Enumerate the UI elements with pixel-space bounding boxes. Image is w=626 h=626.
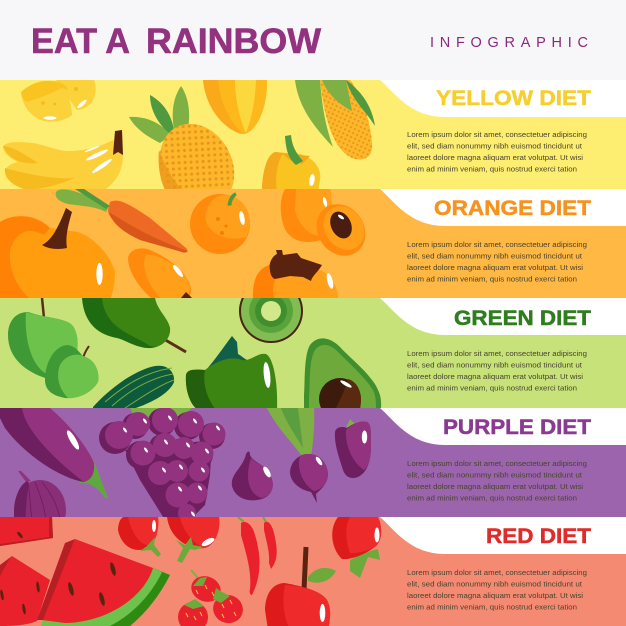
panel header: green (380, 298, 626, 335)
text block: yellow diet: enim ad minim veniam, quis nostrud exerci tation (407, 164, 577, 174)
icon: apple (8, 298, 78, 378)
title: EAT A (31, 22, 130, 61)
icon: grapes (99, 407, 226, 525)
text block: green diet (407, 349, 587, 392)
text block: yellow diet: Lorem ipsum dolor sit amet, consectetuer adipiscing (407, 130, 587, 139)
panel header: red (380, 517, 626, 554)
icon: mango (128, 248, 192, 302)
icon: bananas (3, 130, 123, 189)
panel: green diet (0, 298, 626, 408)
text block: orange diet (407, 240, 587, 284)
icon: green pepper (186, 336, 277, 410)
icon: yellow pepper (262, 135, 320, 192)
text block: green diet: Lorem ipsum dolor sit amet, consectetuer adipiscing (407, 349, 587, 358)
text block: yellow diet: laoreet dolore magna aliquam erat volutpat. Ut wisi (407, 153, 583, 162)
icon: starfruit (203, 80, 267, 134)
illustration: purple foods (0, 408, 371, 517)
text block: purple diet: elit, sed diam nonummy nibh euismod tincidunt ut (407, 470, 583, 480)
text block: yellow diet: elit, sed diam nonummy nibh euismod tincidunt ut (407, 142, 583, 150)
icon: strawberries (178, 570, 247, 626)
icon: eggplant (0, 408, 108, 498)
text block: red diet: Lorem ipsum dolor sit amet, consectetuer adipiscing (407, 568, 587, 577)
icon: avocado (304, 338, 382, 408)
icon: apple red (265, 547, 336, 626)
icon: kiwi (239, 298, 303, 343)
panel: orange diet (0, 189, 626, 302)
text block: purple diet: Lorem ipsum dolor sit amet, consectetuer adipiscing (407, 459, 587, 468)
icon: tomato left (118, 517, 161, 557)
title (31, 22, 321, 61)
text block: red diet: elit, sed diam nonummy nibh euismod tincidunt ut (407, 580, 583, 588)
panel: red diet (0, 517, 626, 626)
text block: orange diet: elit, sed diam nonummy nibh euismod tincidunt ut (407, 252, 583, 260)
text block: green diet: elit, sed diam nonummy nibh euismod tincidunt ut (407, 360, 583, 370)
text block: green diet: enim ad minim veniam, quis nostrud exerci tation (407, 384, 577, 392)
icon: chillies (238, 517, 277, 595)
icon: corn (295, 80, 375, 160)
icon: grape stem leaves (130, 408, 192, 418)
icon: persimmon (253, 250, 338, 300)
icon: lemons (21, 80, 96, 122)
header background (0, 0, 626, 80)
heading: purple diet: PURPLE DIET (443, 416, 591, 439)
icon: pumpkin (0, 208, 115, 300)
panel: purple diet (0, 408, 626, 517)
icon: carrot (56, 189, 188, 253)
panel header: purple (380, 408, 626, 445)
text block: orange diet: enim ad minim veniam, quis nostrud exerci tation (407, 274, 577, 284)
illustration: red foods (0, 517, 381, 626)
icon: pineapple (158, 124, 234, 189)
heading: green diet: GREEN DIET (454, 307, 591, 330)
icon: pineapple leaves (129, 86, 189, 143)
text block: red diet (407, 568, 587, 612)
icon: tomato right (167, 517, 219, 563)
icon: red fruit right (332, 517, 381, 578)
panel header: yellow (380, 80, 626, 117)
text block: yellow diet (407, 130, 587, 174)
illustration: orange foods (0, 189, 375, 302)
icon: onion (14, 471, 66, 517)
heading: red diet: RED DIET (486, 525, 591, 548)
heading: orange diet: ORANGE DIET (434, 197, 591, 220)
icon: orange fruit (190, 193, 250, 254)
subtitle: INFOGRAPHIC (430, 35, 588, 51)
text block: red diet: laoreet dolore magna aliquam erat volutpat. Ut wisi (407, 591, 583, 600)
heading: yellow diet: YELLOW DIET (436, 87, 591, 110)
panel: yellow diet (0, 80, 626, 189)
text block: orange diet: laoreet dolore magna aliquam erat volutpat. Ut wisi (407, 263, 583, 272)
text block: purple diet: enim ad minim veniam, quis nostrud exerci tation (407, 494, 577, 502)
text block: purple diet: laoreet dolore magna aliquam erat volutpat. Ut wisi (407, 482, 583, 491)
icon: watermelon slice top (0, 517, 53, 546)
icon: watermelon large (37, 539, 170, 626)
panel header: orange (380, 189, 626, 226)
icon: radish (267, 408, 328, 503)
text block: purple diet (407, 459, 587, 502)
illustration: yellow foods (3, 80, 375, 189)
illustration: green foods (8, 298, 382, 408)
icon: purple pepper (335, 419, 371, 478)
text block: orange diet: Lorem ipsum dolor sit amet, consectetuer adipiscing (407, 240, 587, 249)
icon: fig (232, 451, 273, 500)
title: RAINBOW (146, 22, 321, 61)
icon: apricots (280, 189, 366, 256)
icon: cucumber (93, 366, 174, 410)
icon: pear (82, 298, 186, 352)
text block: red diet: enim ad minim veniam, quis nostrud exerci tation (407, 602, 577, 612)
text block: green diet: laoreet dolore magna aliquam erat volutpat. Ut wisi (407, 372, 583, 381)
icon: green apple small (45, 345, 98, 398)
icon: watermelon small (0, 556, 50, 626)
